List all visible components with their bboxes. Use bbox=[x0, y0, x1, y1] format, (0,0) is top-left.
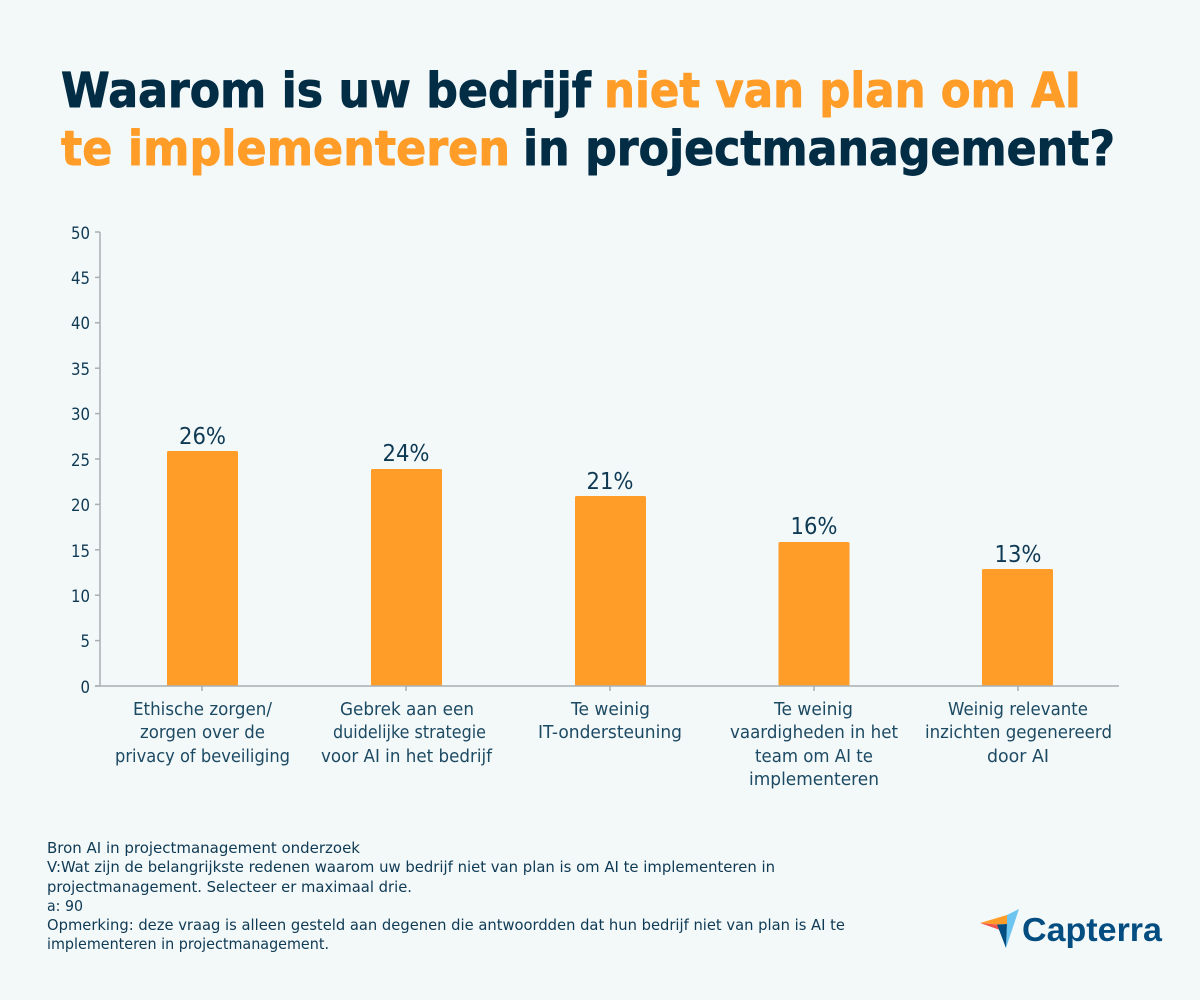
category labels: inzichten gegenereerd bbox=[925, 723, 1112, 743]
bar: vaardigheden 16% bbox=[778, 514, 850, 686]
y axis: 20 bbox=[71, 496, 90, 516]
source note: projectmanagement. Selecteer er maximaal drie. bbox=[47, 878, 412, 896]
title: Waarom is uw bedrijf bbox=[61, 63, 592, 119]
bar: IT-ondersteuning 21%: 21% bbox=[586, 469, 634, 495]
y axis: 15 bbox=[71, 542, 90, 562]
category labels: door AI bbox=[987, 747, 1049, 767]
source note: a: 90 bbox=[47, 897, 83, 915]
category labels: Te weinig bbox=[570, 700, 650, 720]
category labels: vaardigheden in het bbox=[730, 723, 898, 743]
source note bbox=[47, 839, 845, 953]
y axis: 10 bbox=[71, 587, 90, 607]
y axis: 25 bbox=[71, 451, 90, 471]
y axis: 45 bbox=[71, 269, 90, 289]
source note: V:Wat zijn de belangrijkste redenen waarom uw bedrijf niet van plan is om AI te implementeren in bbox=[47, 858, 775, 876]
category labels: Weinig relevante bbox=[948, 700, 1088, 720]
category labels: zorgen over de bbox=[140, 723, 265, 743]
title: in projectmanagement? bbox=[523, 121, 1115, 177]
x axis bbox=[95, 686, 1119, 691]
category labels: duidelijke strategie bbox=[333, 723, 486, 743]
category labels: team om AI te bbox=[755, 747, 873, 767]
category labels bbox=[115, 700, 1112, 790]
bar: Ethische zorgen 26% bbox=[167, 424, 238, 686]
title bbox=[61, 63, 1115, 177]
category labels: voor AI in het bedrijf bbox=[321, 747, 493, 767]
category labels: Ethische zorgen/ bbox=[133, 700, 272, 720]
category labels: Gebrek aan een bbox=[340, 700, 474, 720]
y axis: 0 bbox=[80, 678, 90, 698]
bar: Gebrek aan strategie 24% bbox=[371, 441, 442, 686]
category labels: implementeren bbox=[749, 770, 879, 790]
category labels: Te weinig bbox=[773, 700, 853, 720]
y axis: 5 bbox=[80, 632, 90, 652]
bar: Gebrek aan strategie 24%: 24% bbox=[382, 441, 430, 467]
title: niet van plan om AI bbox=[604, 63, 1081, 119]
bar: vaardigheden 16%: 16% bbox=[790, 514, 838, 540]
bar: Ethische zorgen 26%: 26% bbox=[179, 424, 226, 450]
y axis: 50 bbox=[71, 224, 90, 244]
y axis: 40 bbox=[71, 314, 90, 334]
bar: IT-ondersteuning 21% bbox=[575, 469, 646, 686]
source note: Bron AI in projectmanagement onderzoek bbox=[47, 839, 360, 857]
y axis: 30 bbox=[71, 405, 90, 425]
bar: relevante inzichten 13%: 13% bbox=[994, 542, 1042, 568]
title: te implementeren bbox=[61, 121, 510, 177]
Capterra logo: Capterra bbox=[1022, 911, 1163, 948]
bar: relevante inzichten 13% bbox=[982, 542, 1053, 686]
y axis: 35 bbox=[71, 360, 90, 380]
y axis bbox=[71, 224, 100, 698]
category labels: IT-ondersteuning bbox=[538, 723, 682, 743]
category labels: privacy of beveiliging bbox=[115, 747, 290, 767]
source note: implementeren in projectmanagement. bbox=[47, 935, 329, 953]
source note: Opmerking: deze vraag is alleen gesteld aan degenen die antwoordden dat hun bedrijf niet van plan is AI te bbox=[47, 916, 845, 934]
